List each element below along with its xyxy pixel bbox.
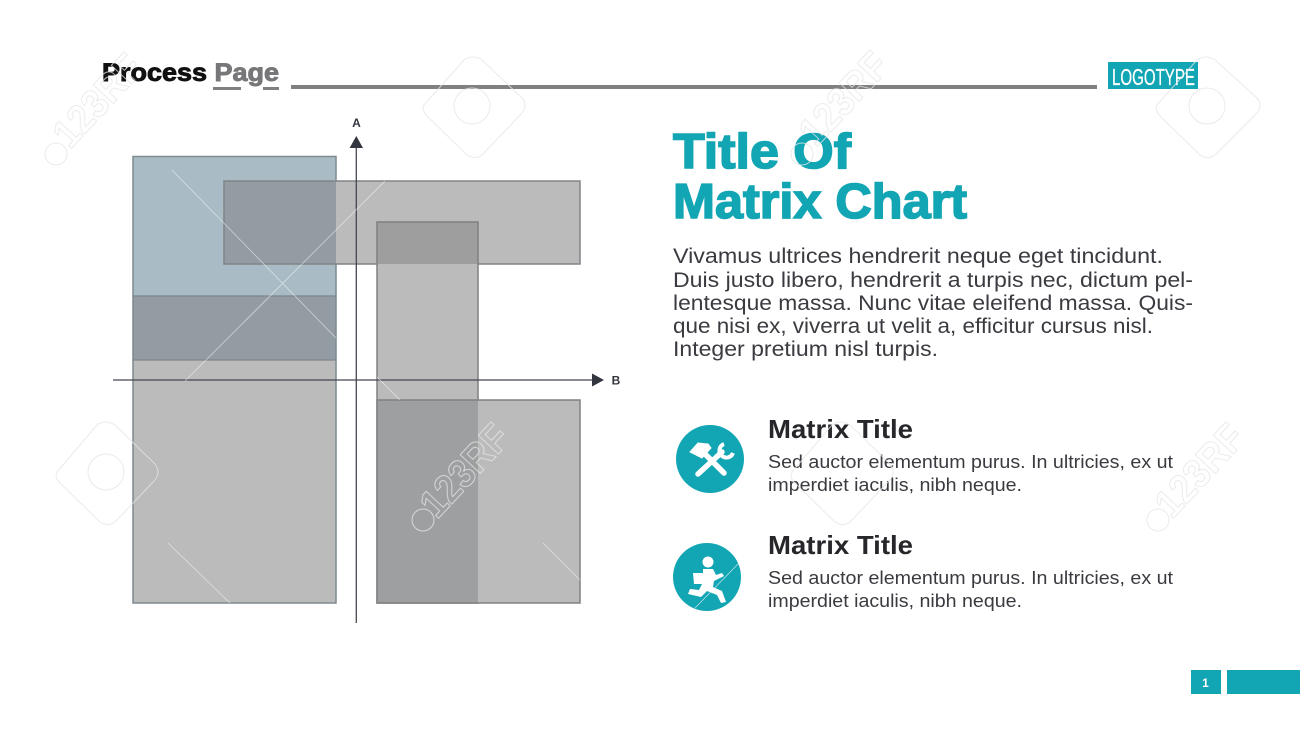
item text: imperdiet iaculis, nibh neque. xyxy=(768,590,1022,611)
matrix item 2 xyxy=(673,530,1173,611)
quadrant block: bottom right xyxy=(377,400,580,603)
main title xyxy=(673,125,967,229)
icon: running person with box xyxy=(673,543,741,611)
axis A: A xyxy=(352,116,361,130)
body paragraph: Vivamus ultrices hendrerit neque eget tincidunt. xyxy=(673,245,1163,268)
item heading: Matrix Title xyxy=(768,414,913,444)
quadrant block: left column xyxy=(133,156,336,603)
page number xyxy=(1191,670,1300,694)
watermark stamps: 123RF xyxy=(790,44,898,154)
icon: hammer and wrench xyxy=(676,425,744,493)
watermark stamps: 123RF xyxy=(411,416,519,526)
header rule xyxy=(291,85,1097,89)
matrix chart xyxy=(113,116,621,623)
body paragraph: que nisi ex, viverra ut velit a, efficitur cursus nisl. xyxy=(673,315,1153,338)
logotype badge xyxy=(1108,62,1198,90)
body paragraph: Duis justo libero, hendrerit a turpis nec, dictum pel- xyxy=(673,269,1193,292)
axis A xyxy=(350,116,363,623)
item text xyxy=(768,451,1173,495)
axis B xyxy=(113,374,621,388)
axis B: B xyxy=(612,374,621,388)
quadrant block: centre vertical xyxy=(377,222,478,603)
main title: Title Of xyxy=(673,125,852,179)
item text: Sed auctor elementum purus. In ultricies, ex ut xyxy=(768,451,1173,472)
watermark stamps: 123RF xyxy=(1146,416,1254,526)
quadrant block: top horizontal xyxy=(224,181,580,264)
item text: Sed auctor elementum purus. In ultricies, ex ut xyxy=(768,567,1173,588)
logotype badge: LOGOTYPE xyxy=(1112,64,1195,90)
item text: imperdiet iaculis, nibh neque. xyxy=(768,474,1022,495)
page number: 1 xyxy=(1202,676,1209,690)
body paragraph: lentesque massa. Nunc vitae eleifend massa. Quis- xyxy=(673,292,1193,315)
item heading: Matrix Title xyxy=(768,530,913,560)
item text xyxy=(768,567,1173,611)
page header xyxy=(102,59,1198,90)
watermark lines xyxy=(168,170,580,603)
watermark stamps xyxy=(44,44,1260,531)
matrix item 1 xyxy=(676,414,1173,495)
watermark stamps: 123RF xyxy=(44,46,152,156)
main title: Matrix Chart xyxy=(673,175,967,229)
body paragraph: Integer pretium nisl turpis. xyxy=(673,338,938,361)
body paragraph xyxy=(673,245,1193,361)
header title: Process Page xyxy=(102,59,279,87)
